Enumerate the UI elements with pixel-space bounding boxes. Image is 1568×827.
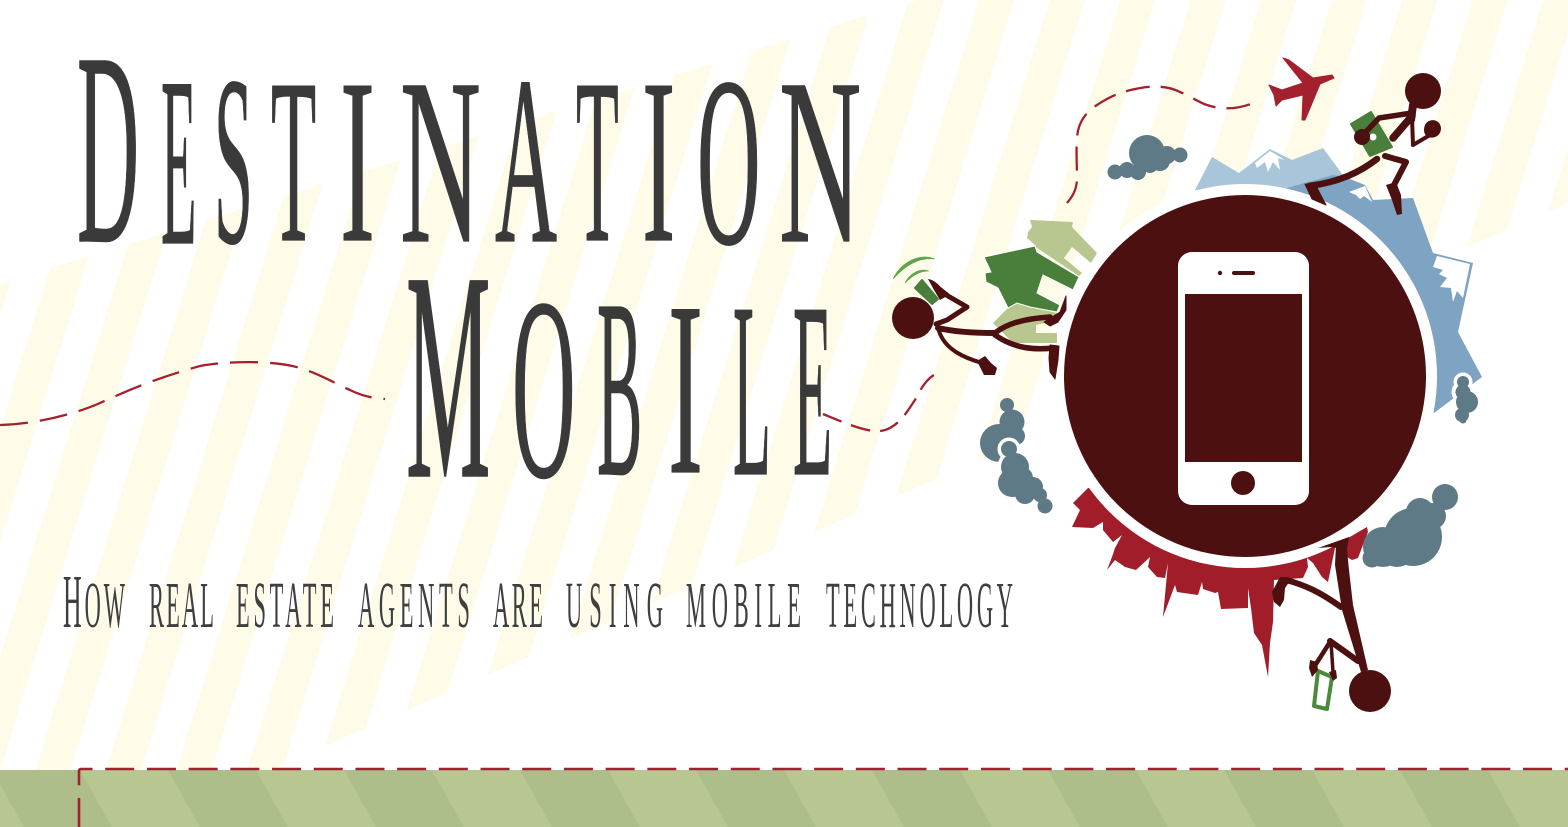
houses [984, 220, 1097, 343]
title: Destination: O [697, 29, 761, 296]
foot [1044, 296, 1066, 326]
airplane icon [1269, 58, 1334, 120]
title: Destination [77, 0, 861, 302]
title: Destination: T [271, 31, 316, 291]
subtitle: HOW [63, 560, 125, 644]
dashed flight path: after title [823, 373, 938, 431]
figure: running on top with tablet [1305, 73, 1441, 215]
phone [915, 280, 938, 304]
snow cap [1255, 151, 1285, 172]
dashed frame line [79, 769, 1568, 827]
cloud: left pair [980, 398, 1052, 514]
title: Destination: A [495, 27, 557, 293]
cloud: right small [1455, 376, 1478, 424]
snow cap [1349, 186, 1372, 202]
title: Mobile: L [733, 253, 771, 529]
phone [1314, 671, 1332, 709]
title: Mobile: M [406, 211, 490, 541]
subtitle [63, 560, 1013, 644]
title: Mobile: I [668, 252, 703, 527]
subtitle: MOBILE [686, 568, 801, 642]
snow cap [1433, 256, 1470, 302]
title: Destination: I [642, 32, 675, 292]
title: Destination: N [400, 31, 481, 293]
dashed flight path: left of title [0, 362, 385, 425]
subtitle: USING [566, 568, 663, 642]
title: Destination: D [77, 0, 139, 302]
mountains: dark range [1287, 175, 1482, 413]
tablet [1351, 112, 1392, 156]
house: light bottom [993, 303, 1057, 343]
subtitle: TECHNOLOGY [826, 568, 1013, 642]
title: Destination: S [214, 26, 253, 295]
title: Mobile: E [793, 252, 832, 529]
subtitle: ARE [493, 568, 543, 642]
subtitle: ESTATE [236, 568, 334, 642]
title: Mobile [406, 211, 832, 541]
cloud: top [1108, 135, 1188, 180]
title: Destination: E [161, 28, 196, 297]
globe [1064, 195, 1426, 557]
subtitle: AGENTS [358, 568, 470, 642]
dashed flight path: to airplane [1067, 87, 1260, 203]
title: Mobile: B [597, 249, 642, 530]
title: Destination: I [340, 32, 375, 292]
title: Destination: T [576, 30, 619, 292]
title: Mobile: O [512, 244, 576, 532]
figure: running on left with phone [892, 257, 1066, 379]
icon: smartphone [1178, 252, 1309, 505]
mountains: light range [1195, 148, 1345, 240]
title: Destination: N [779, 31, 861, 293]
cloud: bottom right [1362, 484, 1458, 568]
globe ring [1053, 184, 1437, 568]
hand [977, 356, 997, 375]
subtitle: REAL [149, 568, 214, 642]
house: light top [1027, 220, 1097, 276]
elbow gap [934, 303, 958, 320]
city skyline [1072, 480, 1368, 677]
house: dark [984, 246, 1079, 312]
green footer band [0, 770, 1568, 827]
signal waves [893, 257, 935, 279]
figure: hanging at bottom with phone [1272, 537, 1391, 712]
